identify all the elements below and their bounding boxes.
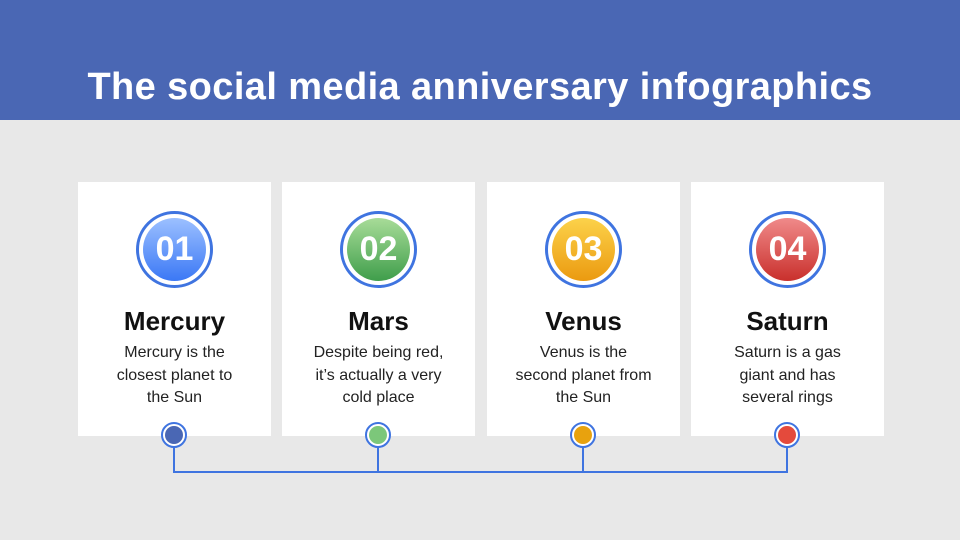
text [734,344,841,406]
icon: 04 [749,211,826,288]
text: giant and has [739,366,836,384]
text: Venus is the [540,344,627,361]
text: it’s actually a very [316,366,441,384]
dot 1 [161,422,187,448]
heading: Saturn [746,306,829,336]
text: Despite being red, [314,344,443,361]
icon: 04: 04 [769,230,806,268]
panel: venus [487,182,680,436]
text: Saturn is a gas [734,344,841,361]
heading: Mercury [124,306,225,336]
header bar [0,0,960,120]
icon: 03 [545,211,622,288]
text: Mercury is the [124,344,225,361]
dot 4 [774,422,800,448]
heading: Venus [545,306,622,336]
text: cold place [342,389,415,406]
text [515,344,652,406]
text: the Sun [147,389,202,406]
text [117,344,232,406]
panel: saturn [691,182,884,436]
heading: Mars [348,306,409,336]
icon: 03: 03 [565,230,602,268]
text: second planet from [515,366,652,384]
icon: 01 [136,211,213,288]
text: several rings [742,389,833,406]
icon: 02: 02 [360,230,397,268]
text: the Sun [556,389,611,406]
title: The social media anniversary infographics [87,66,873,108]
panel: mercury [78,182,271,436]
dot 3 [570,422,596,448]
icon: 02 [340,211,417,288]
text [314,344,443,406]
dot 2 [365,422,391,448]
panel: mars [282,182,475,436]
icon: 01: 01 [156,230,193,268]
text: closest planet to [117,366,232,384]
